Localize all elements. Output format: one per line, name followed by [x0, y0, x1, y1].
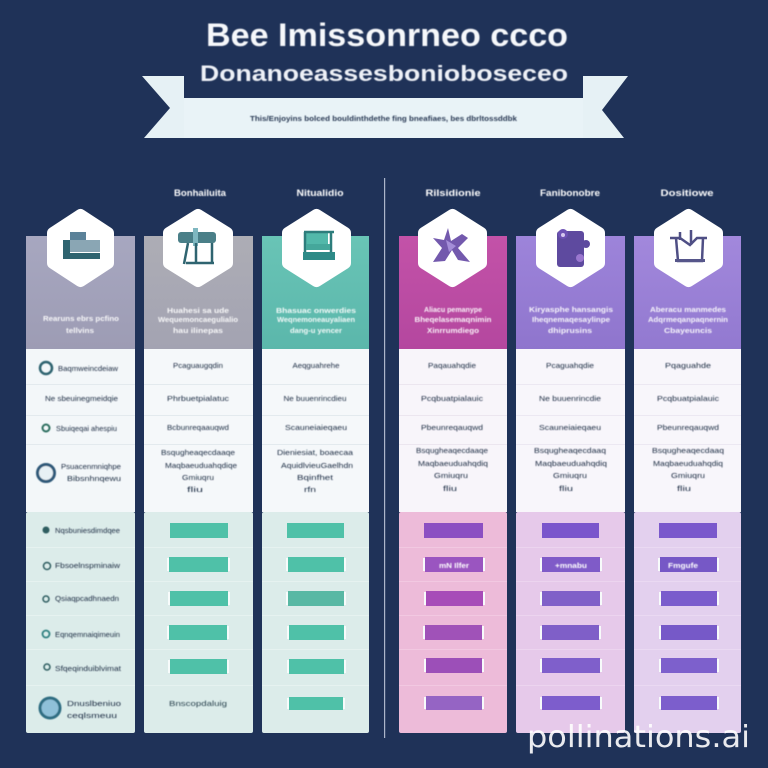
- column headings: [174, 188, 714, 198]
- first column labels and icons: Bibsnhnqewu: [67, 474, 121, 483]
- comparison text rows: fliu: [677, 484, 691, 493]
- header descriptions: Bheqelasemaqnimin: [414, 315, 492, 324]
- header descriptions: dang-u yencer: [290, 326, 342, 335]
- ribbon banner: [142, 76, 628, 138]
- comparison text rows: Maqbaeuduahqdiq: [653, 459, 723, 468]
- hexagon icon badges: [53, 215, 717, 281]
- comparison text rows: Pbeunreqauqwd: [421, 423, 483, 432]
- comparison text rows: rfn: [304, 485, 316, 494]
- bar label: Fmgufe: [668, 563, 698, 570]
- header descriptions: Aliacu pemanype: [424, 305, 482, 314]
- header descriptions: dhiprusins: [548, 326, 592, 335]
- icon: star figure: [433, 228, 470, 262]
- comparison text rows: Maqbaeuduahqdiq: [418, 459, 488, 468]
- icon: round badge: [40, 362, 52, 374]
- comparison text rows: Dieniesiat, boaecaa: [277, 448, 354, 457]
- header descriptions: Rearuns ebrs pcfino: [43, 314, 119, 323]
- first column labels and icons: Fbsoelnspminaiw: [55, 561, 121, 570]
- header descriptions: Xinrrumdiego: [427, 326, 479, 335]
- violet bars column 5: [542, 523, 600, 710]
- watermark: pollinations.ai: [527, 720, 750, 755]
- comparison text rows: Pcaguahqdie: [546, 361, 594, 370]
- white bar end caps: [167, 558, 719, 709]
- icon: gate: [178, 228, 216, 264]
- bar label: +mnabu: [555, 563, 587, 570]
- comparison text rows: Bsqugheaqecdaaqe: [416, 446, 488, 455]
- comparison text rows: Paqauahqdie: [428, 361, 476, 370]
- icon: flower: [42, 526, 50, 534]
- comparison text rows: fliu: [187, 485, 203, 494]
- header descriptions: Bhasuac onwerdies: [276, 306, 356, 315]
- ribbon caption: This/Enjoyins bolced bouldinthdethe fing bneafiaes, bes dbrltossddbk: [250, 114, 518, 123]
- comparison text rows: Gmiuqru: [553, 471, 587, 480]
- icon: tray stack: [63, 232, 100, 259]
- column headings: Bonhailuita: [174, 188, 227, 198]
- icon: small ring: [42, 424, 50, 432]
- first column labels and icons: ceqlsmeuu: [67, 711, 117, 720]
- column 1 panel: [26, 236, 135, 733]
- comparison text rows: Gmiuqru: [434, 471, 468, 480]
- first column labels and icons: [38, 362, 122, 720]
- header descriptions: Cbayeuncis: [664, 326, 712, 335]
- header descriptions: Huahesi sa ude: [167, 306, 229, 315]
- comparison text rows: Scauneiaieqaeu: [539, 423, 601, 432]
- first column labels and icons: Qsiaqpcadhnaedn: [55, 594, 119, 603]
- first column labels and icons: Dnuslbeniuo: [67, 699, 121, 708]
- header descriptions: tellvins: [66, 326, 94, 335]
- first column labels and icons: Baqmweincdeiaw: [58, 364, 119, 373]
- teal bars column 3: [287, 523, 344, 710]
- comparison text rows: Scauneiaieqaeu: [285, 423, 347, 432]
- header descriptions: Wequemoncaegulialio: [158, 315, 238, 324]
- comparison text rows: Ne buuenrincdie: [539, 394, 601, 403]
- comparison text rows: Gmiuqru: [182, 473, 214, 482]
- icon: globe badge: [38, 464, 54, 482]
- header descriptions: Iheqnemaqesaylinpe: [532, 315, 610, 324]
- icon: large globe: [40, 698, 60, 718]
- first column labels and icons: Psuacenmniqhpe: [61, 462, 121, 471]
- icon: block figure: [557, 229, 590, 267]
- header descriptions: hau ilinepas: [173, 326, 223, 335]
- column 3 panel: [262, 236, 369, 733]
- subtitle: Donanoeassesbonioboseceo: [200, 61, 568, 86]
- comparison text rows: Bcbunreqaauqwd: [167, 423, 229, 432]
- comparison text rows: Maqbaeuduahqdiq: [535, 459, 607, 468]
- column 2 panel: [144, 236, 253, 733]
- comparison text rows: Bsqugheaqecdaaq: [534, 446, 606, 455]
- center divider: [384, 178, 385, 738]
- first column labels and icons: Eqnqemnaiqimeuin: [55, 630, 120, 639]
- header descriptions: Weqnemoneauyaliaen: [277, 315, 355, 324]
- comparison text rows: Bsqugheaqecdaaqe: [161, 448, 235, 457]
- comparison text rows: fliu: [443, 484, 457, 493]
- header descriptions: Aberacu manmedes: [650, 305, 726, 314]
- comparison text rows: Pcqbuatpialauic: [421, 394, 483, 403]
- icon: small loop: [44, 664, 50, 670]
- first column labels and icons: Ne sbeuinegmeidqie: [45, 394, 118, 403]
- first column labels and icons: Nqsbuniesdimdqee: [55, 526, 120, 535]
- magenta-purple bars column 4: [424, 523, 483, 710]
- icon: cabinet: [303, 232, 335, 260]
- comparison text rows: Pqaguahde: [665, 361, 711, 370]
- comparison text rows: AquidlvieuGaelhdn: [281, 461, 353, 470]
- header descriptions: [43, 305, 728, 335]
- comparison text rows: Bqinfhet: [297, 473, 334, 482]
- comparison text rows: Pcqbuatpialauic: [657, 394, 719, 403]
- comparison text rows: Phrbuetpialatuc: [167, 394, 229, 403]
- bar label: mN Ilfer: [439, 563, 469, 570]
- icon: letter d: [44, 562, 50, 570]
- column headings: Rilsidionie: [426, 188, 480, 198]
- comparison text rows: fliu: [559, 484, 573, 493]
- first column labels and icons: Sfqeqinduiblvimat: [55, 664, 122, 673]
- column headings: Dositiowe: [660, 188, 714, 198]
- title: Bee Imissonrneo ccco: [206, 17, 568, 53]
- comparison text rows: Ne buuenrincdieu: [284, 394, 346, 403]
- violet bars column 6: [659, 523, 717, 710]
- header descriptions: Kiryasphe hansangis: [529, 305, 613, 314]
- icon: basket: [670, 230, 707, 262]
- column 4 panel: [399, 236, 507, 733]
- comparison text rows: Maqbaeuduahqdiqe: [165, 461, 237, 470]
- column 6 panel: [634, 236, 741, 733]
- bar-row note column 2: Bnscopdaluig: [169, 699, 227, 708]
- comparison text rows: Pbeunreqauqwd: [657, 423, 719, 432]
- first column labels and icons: Sbuiqeqai ahespiu: [56, 424, 117, 433]
- comparison text rows: Bsqugheaqecdaaq: [652, 446, 724, 455]
- icon: small dot: [43, 596, 49, 602]
- teal bars column 2: [169, 523, 228, 674]
- column 5 panel: [516, 236, 625, 733]
- icon: swirl: [42, 630, 50, 638]
- column headings: Fanibonobre: [540, 188, 600, 198]
- header descriptions: Adqrmeqanpaqnernin: [648, 315, 728, 324]
- comparison text rows: Pcaguaugqdin: [173, 361, 223, 370]
- comparison text rows: Gmiuqru: [671, 471, 705, 480]
- comparison text rows: [161, 361, 724, 494]
- column headings: Nitualidio: [296, 188, 344, 198]
- comparison text rows: Aeqguahrehe: [292, 361, 340, 370]
